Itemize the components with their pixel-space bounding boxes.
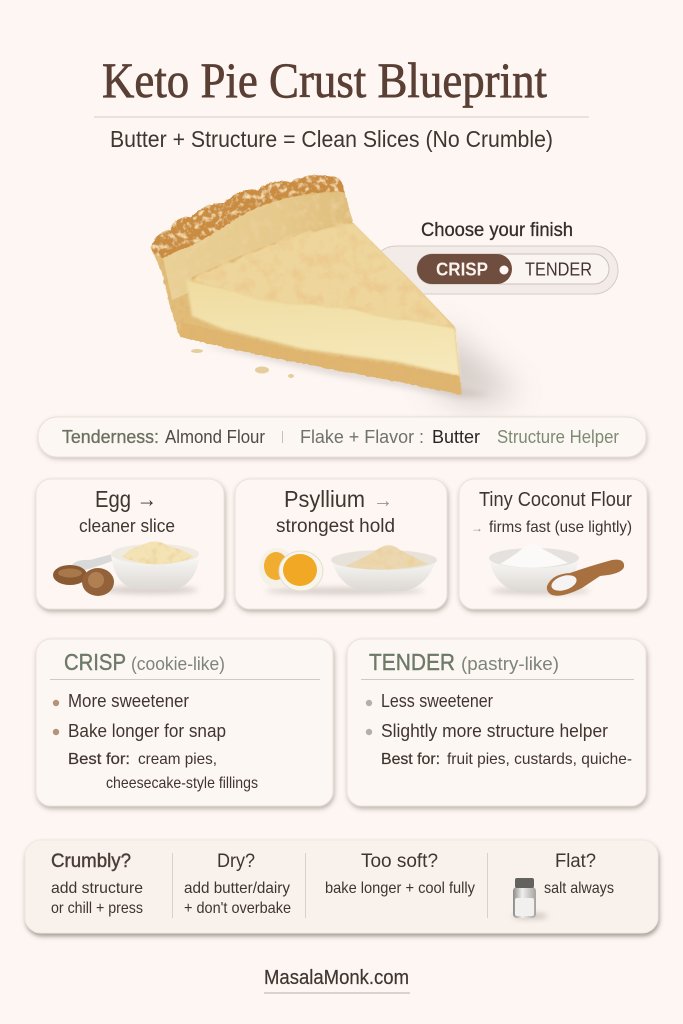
panel: crisp [36, 639, 333, 806]
card: egg: cleaner slice [79, 516, 175, 536]
dry: add butter/dairy [184, 880, 290, 897]
too soft: bake longer + cool fully [325, 880, 475, 897]
dry: Dry? [217, 851, 255, 872]
ingredient bar [38, 417, 646, 457]
panel: crisp: cheesecake-style fillings [106, 775, 258, 792]
panel: crisp: Bake longer for snap [68, 721, 226, 741]
ingredient bar: Butter [432, 427, 480, 447]
top surface [192, 223, 455, 328]
bottom crust [180, 322, 462, 395]
toggle switch [417, 254, 609, 284]
dry: + don't overbake [184, 900, 291, 917]
troubleshooting bar [25, 840, 658, 933]
card: psyllium: strongest hold [276, 516, 395, 537]
card: psyllium: Psyllium [284, 486, 365, 512]
pie slice illustration [151, 175, 520, 405]
card: coconut flour [459, 479, 647, 609]
crisp heading: CRISP [64, 649, 126, 675]
crumbly: Crumbly? [51, 851, 131, 872]
crumbly: add structure [51, 880, 143, 897]
panel: tender [347, 639, 646, 806]
icon: salt shaker [512, 878, 548, 919]
too soft [325, 851, 475, 897]
panel: tender: Slightly more structure helper [381, 721, 608, 741]
fluted rim [151, 175, 344, 258]
finish toggle [372, 220, 618, 294]
flake and flavor: Flake + Flavor : [300, 427, 424, 447]
icon: eggs and bowl [259, 545, 437, 594]
tenderness: Tenderness: [62, 427, 159, 447]
panel: crisp: cream pies, [138, 751, 217, 768]
panel: tender: (pastry-like) [461, 654, 559, 674]
crisp bullets [53, 700, 59, 706]
filling face [186, 280, 460, 376]
tender best for: Best for: [381, 751, 440, 768]
panel: tender: fruit pies, custards, quiche- [447, 751, 632, 768]
toggle label: Choose your finish [421, 220, 573, 241]
tender heading: TENDER [369, 649, 455, 675]
flat: Flat? [555, 851, 596, 872]
crumbly [51, 851, 143, 917]
title: Keto Pie Crust Blueprint [102, 52, 547, 108]
back crust wall [163, 192, 353, 300]
card: coconut flour: firms fast (use lightly) [489, 519, 632, 536]
panel: crisp: More sweetener [68, 691, 189, 711]
toggle switch: CRISP [436, 260, 488, 280]
subtitle: Butter + Structure = Clean Slices (No Crumble) [110, 126, 553, 152]
card: psyllium: → [373, 490, 393, 512]
dry [184, 851, 291, 917]
tender bullets [366, 700, 372, 706]
flat [512, 851, 614, 919]
card: egg: Egg → [95, 486, 157, 512]
toggle switch: TENDER [525, 260, 592, 280]
card: coconut flour: Tiny Coconut Flour [479, 489, 632, 511]
panel: crisp: (cookie-like) [131, 654, 225, 674]
footer site name: MasalaMonk.com [264, 967, 409, 989]
toggle outer track [372, 246, 618, 294]
ingredient bar: Almond Flour [165, 427, 265, 447]
crust silhouette [151, 187, 462, 395]
structure helper: Structure Helper [497, 427, 619, 447]
crumbly: or chill + press [51, 900, 143, 917]
too soft: Too soft? [361, 851, 438, 872]
cast shadow [430, 325, 520, 405]
flat: salt always [544, 880, 614, 897]
crisp best for: Best for: [68, 751, 130, 768]
icon: bowl and wooden spoon [489, 544, 624, 596]
panel: tender: Less sweetener [381, 691, 493, 711]
icon: spoon, nuts and bowl [53, 542, 200, 596]
card: egg [36, 479, 224, 609]
crumbs [191, 349, 294, 378]
card: coconut flour: → [471, 521, 483, 535]
card: psyllium [235, 479, 447, 609]
